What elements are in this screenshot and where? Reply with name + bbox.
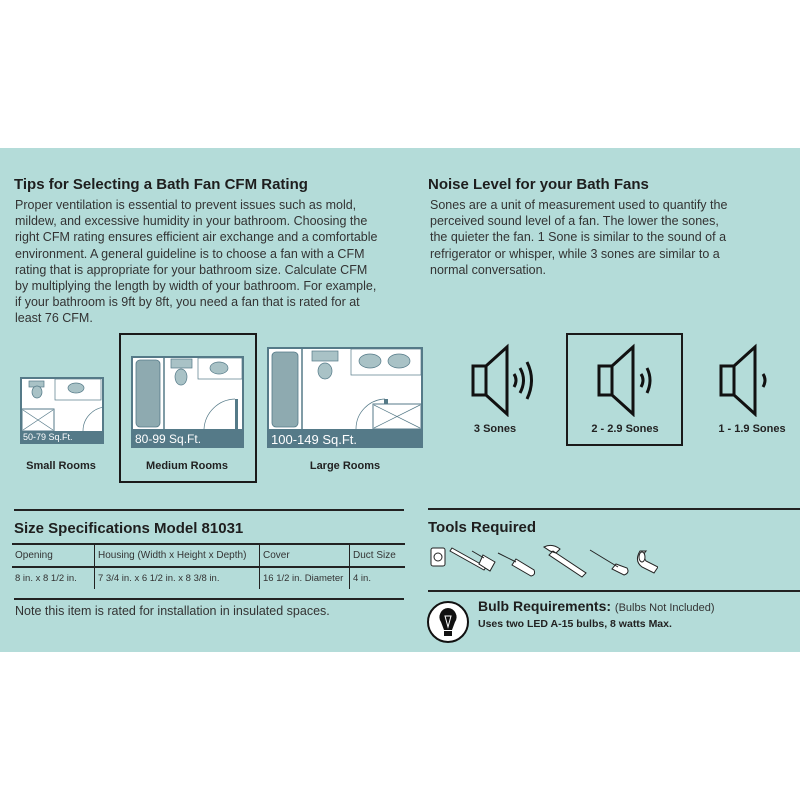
icon: speaker 2-2.9 sones bbox=[598, 344, 652, 417]
icon: speaker 3 sones bbox=[472, 344, 533, 417]
text: tips paragraph: by multiplying the length by width of your bathroom. For example, bbox=[15, 279, 376, 293]
room: small bbox=[20, 377, 104, 444]
label: medium rooms: Medium Rooms bbox=[146, 460, 228, 472]
text: tips paragraph: least 76 CFM. bbox=[15, 311, 93, 325]
text: noise paragraph: the quieter the fan. 1 Sone is similar to the sound of a bbox=[430, 230, 726, 244]
text: note: Note this item is rated for installation in insulated spaces. bbox=[15, 604, 330, 618]
text: noise paragraph bbox=[430, 198, 727, 277]
table: specifications: Duct Size bbox=[353, 550, 396, 561]
label: 2-2.9 sones: 2 - 2.9 Sones bbox=[591, 423, 659, 435]
text: tips paragraph: Proper ventilation is essential to prevent issues such as mold, bbox=[15, 198, 356, 212]
label: 50-79: 50-79 Sq.Ft. bbox=[23, 432, 73, 442]
title: noise level: Noise Level for your Bath Fans bbox=[428, 176, 649, 193]
label: large rooms: Large Rooms bbox=[310, 460, 380, 472]
label: 100-149: 100-149 Sq.Ft. bbox=[271, 432, 357, 447]
table: specifications: Opening bbox=[15, 550, 53, 561]
title: tips: Tips for Selecting a Bath Fan CFM Rating bbox=[14, 176, 308, 193]
text: tips paragraph: environment. A general guideline is to choose a fan with a CFM bbox=[15, 247, 365, 261]
title: size specifications: Size Specifications Model 81031 bbox=[14, 520, 243, 537]
text: tips paragraph: right CFM rating ensures efficient air exchange and a comfortable bbox=[15, 230, 377, 244]
table: specifications: Cover bbox=[263, 550, 290, 561]
table: specifications bbox=[12, 543, 405, 589]
room: large bbox=[267, 347, 423, 448]
icon: bulb bbox=[427, 601, 469, 643]
text: bulb details: Uses two LED A-15 bulbs, 8 watts Max. bbox=[478, 618, 672, 630]
divider lines bbox=[14, 509, 404, 511]
text: tips paragraph: rating that is appropriate for your bathroom size. Calculate CFM bbox=[15, 263, 367, 277]
icons: tools bbox=[430, 544, 658, 578]
text: noise paragraph: refrigerator or whisper, while 3 sones are similar to a bbox=[430, 247, 720, 261]
table: specifications: 16 1/2 in. Diameter bbox=[263, 573, 343, 584]
title: tools required: Tools Required bbox=[428, 519, 536, 536]
table: specifications: 7 3/4 in. x 6 1/2 in. x 8 3/8 in. bbox=[98, 573, 219, 584]
icon: speaker 1-1.9 sones bbox=[720, 344, 766, 417]
background band bbox=[0, 148, 800, 652]
highlight box: medium bbox=[119, 333, 257, 483]
label: 80-99: 80-99 Sq.Ft. bbox=[135, 432, 201, 446]
highlight box: 2-2.9 sones bbox=[566, 333, 683, 446]
table: specifications: 8 in. x 8 1/2 in. bbox=[15, 573, 77, 584]
table: specifications: Housing (Width x Height x Depth) bbox=[98, 550, 246, 561]
label: small rooms: Small Rooms bbox=[26, 460, 96, 472]
label: 1-1.9 sones: 1 - 1.9 Sones bbox=[718, 423, 786, 435]
text: tips paragraph: mildew, and excessive humidity in your bathroom. Choosing the bbox=[15, 214, 367, 228]
text: noise paragraph: normal conversation. bbox=[430, 263, 546, 277]
text: noise paragraph: perceived sound level of a fan. The lower the sones, bbox=[430, 214, 719, 228]
label: 3 sones: 3 Sones bbox=[474, 423, 516, 435]
text: bulb requirements: Bulb Requirements: (Bulbs Not Included) bbox=[478, 598, 715, 614]
room: medium bbox=[131, 356, 244, 448]
table: specifications: 4 in. bbox=[353, 573, 371, 584]
text: tips paragraph: if your bathroom is 9ft by 8ft, you need a fan that is rated for at bbox=[15, 295, 360, 309]
text: noise paragraph: Sones are a unit of measurement used to quantify the bbox=[430, 198, 727, 212]
text: tips paragraph bbox=[15, 198, 377, 325]
